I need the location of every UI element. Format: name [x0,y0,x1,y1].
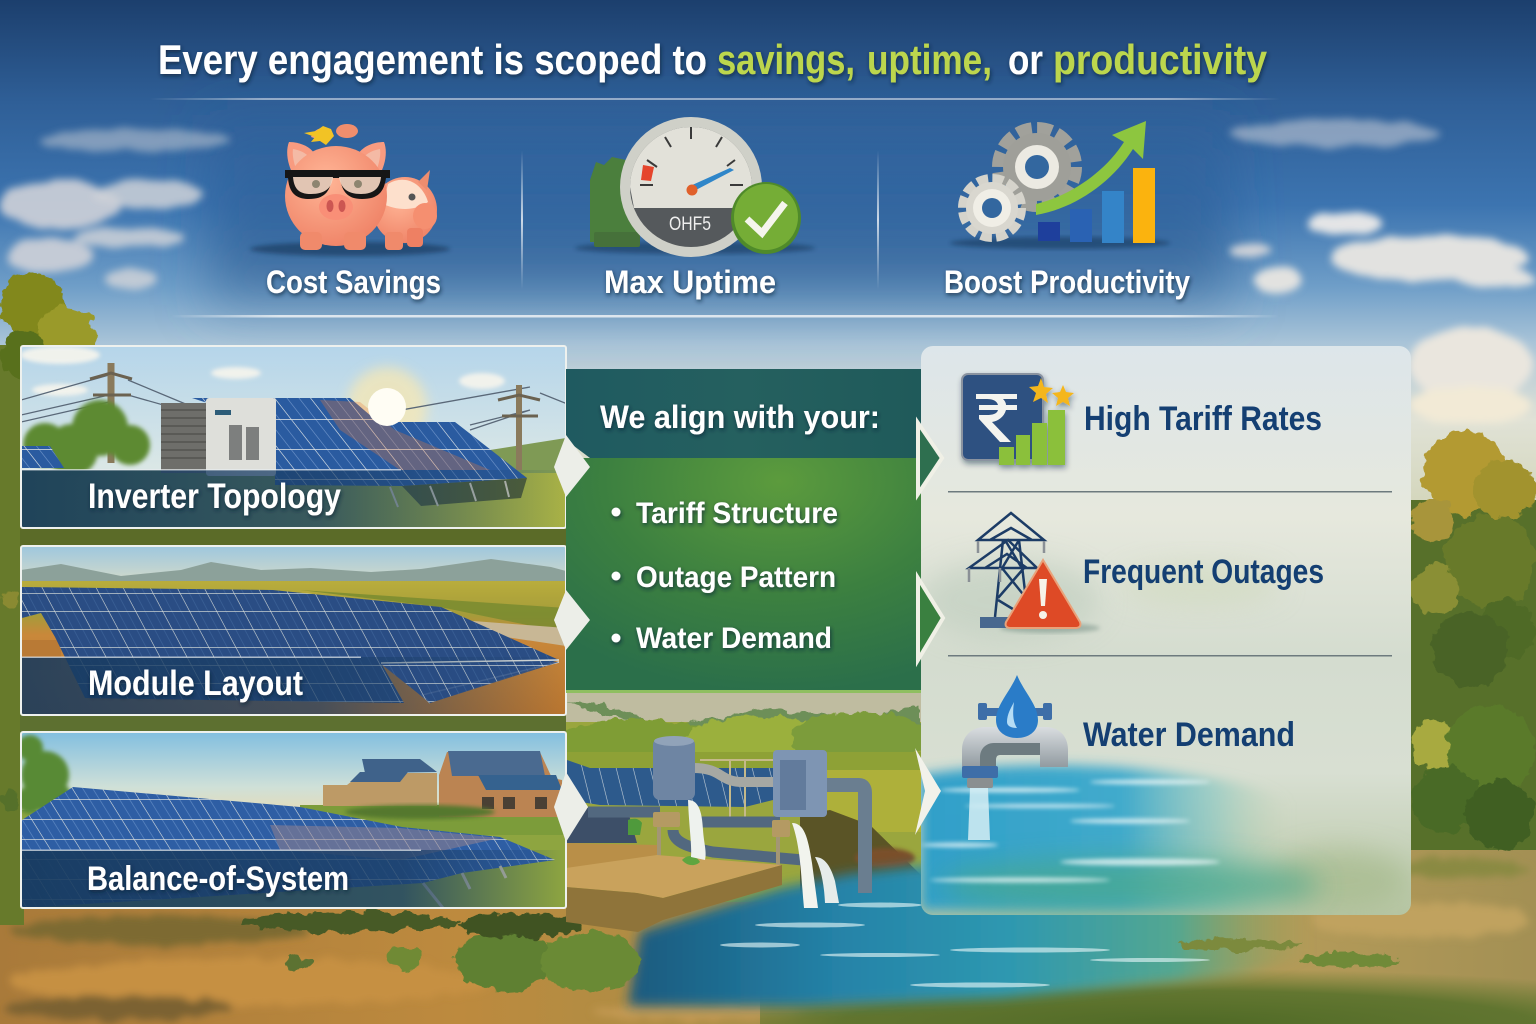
label: frequent outages: Frequent Outages [1083,553,1324,591]
icon: gears, bars and growth arrow [950,121,1170,249]
title: or [1008,36,1043,83]
arrow: alignment to high tariff rates [918,423,942,494]
panel: inverter topology: Inverter Topology [88,477,341,516]
panel: inverter topology [20,346,570,530]
title: productivity [1053,36,1268,83]
icon: uptime gauge with check: OHF5 [669,214,711,235]
arrow: balance-of-system to alignment [554,772,588,842]
panel: balance-of-system: Balance-of-System [87,860,349,898]
list: alignment factors: Water Demand [636,622,832,655]
panel: module layout: Module Layout [88,664,303,703]
label: high tariff rates: High Tariff Rates [1084,400,1322,438]
title: Every engagement is scoped to [158,36,707,83]
trees: right edge [1411,430,1536,850]
scene: pump, pipes, platform and waterfalls [566,736,865,932]
icon: piggy bank with glasses [250,124,450,256]
title [158,36,1268,83]
panel: we align with your [566,369,921,693]
label: max uptime: Max Uptime [604,264,776,300]
list: alignment factors: Outage Pattern [636,561,836,594]
icon: faucet with water drop [962,675,1068,840]
arrow: alignment to water demand [915,748,941,835]
icon: uptime gauge with check [575,117,815,257]
label: boost productivity: Boost Productivity [944,264,1190,300]
arrow: alignment to frequent outages [918,578,943,660]
panel: balance-of-system [16,732,566,910]
water pool [628,866,1330,1006]
icon: transmission tower with warning [969,513,1100,633]
panel: module layout [21,546,566,716]
title: savings, [717,36,855,83]
foreground shrubs [240,912,1400,992]
panel: right customer needs [920,346,1411,915]
trees: left edge [0,273,570,925]
title: uptime, [867,36,992,83]
heading: we align with your: We align with your: [600,399,880,435]
label: water demand: Water Demand [1083,716,1295,754]
scene: canal backdrop with trees and bank [550,692,930,902]
arrow: inverter topology to alignment [554,435,590,497]
icon: rupee with bars and stars [962,374,1074,465]
label: cost savings: Cost Savings [266,264,441,300]
arrow: module layout to alignment [554,590,590,650]
list: alignment factors: Tariff Structure [636,497,838,530]
list: alignment factors [612,497,838,655]
